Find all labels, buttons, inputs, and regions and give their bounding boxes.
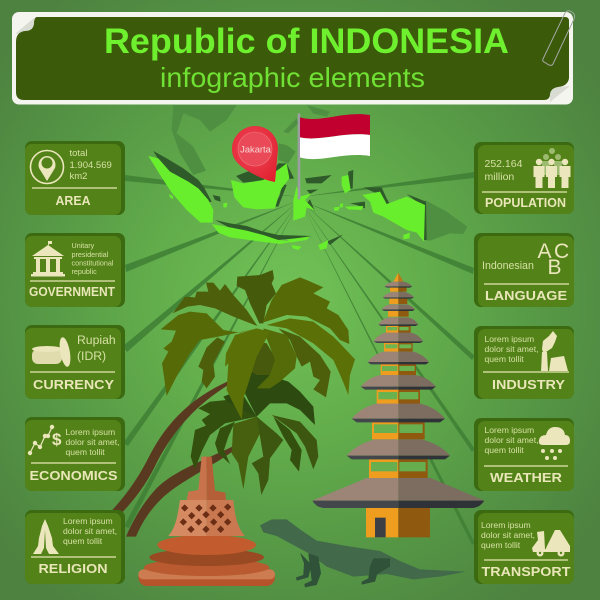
weather label: WEATHER [490,471,562,485]
stupa spire [187,457,207,500]
stupa [138,457,275,586]
government text: presidential [72,250,109,259]
population text: million [484,171,514,183]
weather text: Lorem ipsum [484,425,534,435]
map of Indonesia [148,105,467,250]
pagoda [312,273,484,537]
panel: currency [25,325,125,399]
area text: 1.904.569 [70,160,112,171]
panel: language [474,233,574,307]
government text: Unitary [72,241,95,250]
economics label: ECONOMICS [30,469,118,483]
panel: industry [474,326,574,399]
pagoda roofs [312,282,484,508]
panel: area [25,141,125,215]
upper palm crown [161,270,355,419]
title text: Republic of INDONESIA [104,22,509,61]
transport label: TRANSPORT [482,565,571,579]
pagoda walls [366,287,430,537]
icon: letters: C [554,240,569,263]
religion text: quem tollit [63,536,103,546]
icon: people [534,148,570,188]
panel: government [25,233,125,307]
banner plate [16,17,569,100]
komodo body [260,519,466,579]
economics text: Lorem ipsum [66,427,115,437]
map pin: Jakarta: Jakarta [240,144,272,155]
banner frame [12,12,573,104]
komodo dragon [260,519,466,587]
panel: transport [474,510,574,584]
icon: government building [31,241,65,276]
panel: population [474,142,574,214]
weather text: dolor sit amet, [484,435,538,445]
lower palm crown [191,372,318,495]
title banner [12,11,575,104]
transport text: quem tollit [481,540,521,550]
faded neighbouring land [172,105,467,241]
icon: chart and dollar: $ [52,430,62,449]
religion label: RELIGION [38,562,108,576]
Java [212,224,293,244]
paperclip [543,11,575,65]
language text: Indonesian [482,260,534,272]
finial [393,273,398,282]
radiating connector lines [123,172,475,545]
industry text: Lorem ipsum [484,334,534,344]
religion text: dolor sit amet, [63,526,117,536]
language label: LANGUAGE [485,289,567,303]
area text: km2 [70,171,87,182]
flag pole [298,113,300,199]
panel: weather [474,418,574,491]
icon: praying hands [33,519,59,554]
Sumatra [148,156,213,223]
panel: economics [25,417,125,491]
icon: rain cloud [539,427,570,460]
icon: letters: A [538,240,552,263]
icon: coins [32,336,72,368]
currency text: (IDR) [77,349,106,363]
currency label: CURRENCY [33,378,115,392]
stupa bell [168,500,207,536]
icon: dump truck [532,530,570,556]
subtitle text: infographic elements [160,62,425,93]
economics text: dolor sit amet, [66,437,119,447]
small islands [342,175,351,193]
government label: GOVERNMENT [29,285,115,299]
panel: religion [25,510,125,584]
flag cloth [300,114,370,138]
area label: AREA [56,194,90,208]
religion text: Lorem ipsum [63,516,113,526]
stupa lattice [180,503,231,533]
icon: letters: B [548,256,562,279]
trunks [109,381,229,513]
currency text: Rupiah [77,333,116,347]
icon: factory [541,331,568,371]
Sulawesi [293,186,315,221]
population label: POPULATION [485,196,566,210]
transport text: dolor sit amet, [481,530,535,540]
icon: location pin [30,150,64,184]
government text: republic [72,267,97,276]
government text: constitutional [72,258,114,268]
island shadows [153,151,427,245]
icon: letters [538,240,569,279]
islands [148,156,425,250]
map pin: Jakarta [232,126,278,182]
weather text: quem tollit [484,445,524,455]
economics text: quem tollit [66,447,105,457]
population text: 252.164 [484,158,523,170]
industry text: quem tollit [484,354,524,364]
transport text: Lorem ipsum [481,520,531,530]
Borneo [231,163,289,209]
area text: total [70,148,87,159]
industry text: dolor sit amet, [484,344,538,354]
komodo legs [296,553,312,581]
Papua [362,192,425,242]
stupa base tiers [138,535,275,586]
industry label: INDUSTRY [492,378,566,392]
flag of Indonesia [298,113,370,199]
palm trees [109,270,355,537]
